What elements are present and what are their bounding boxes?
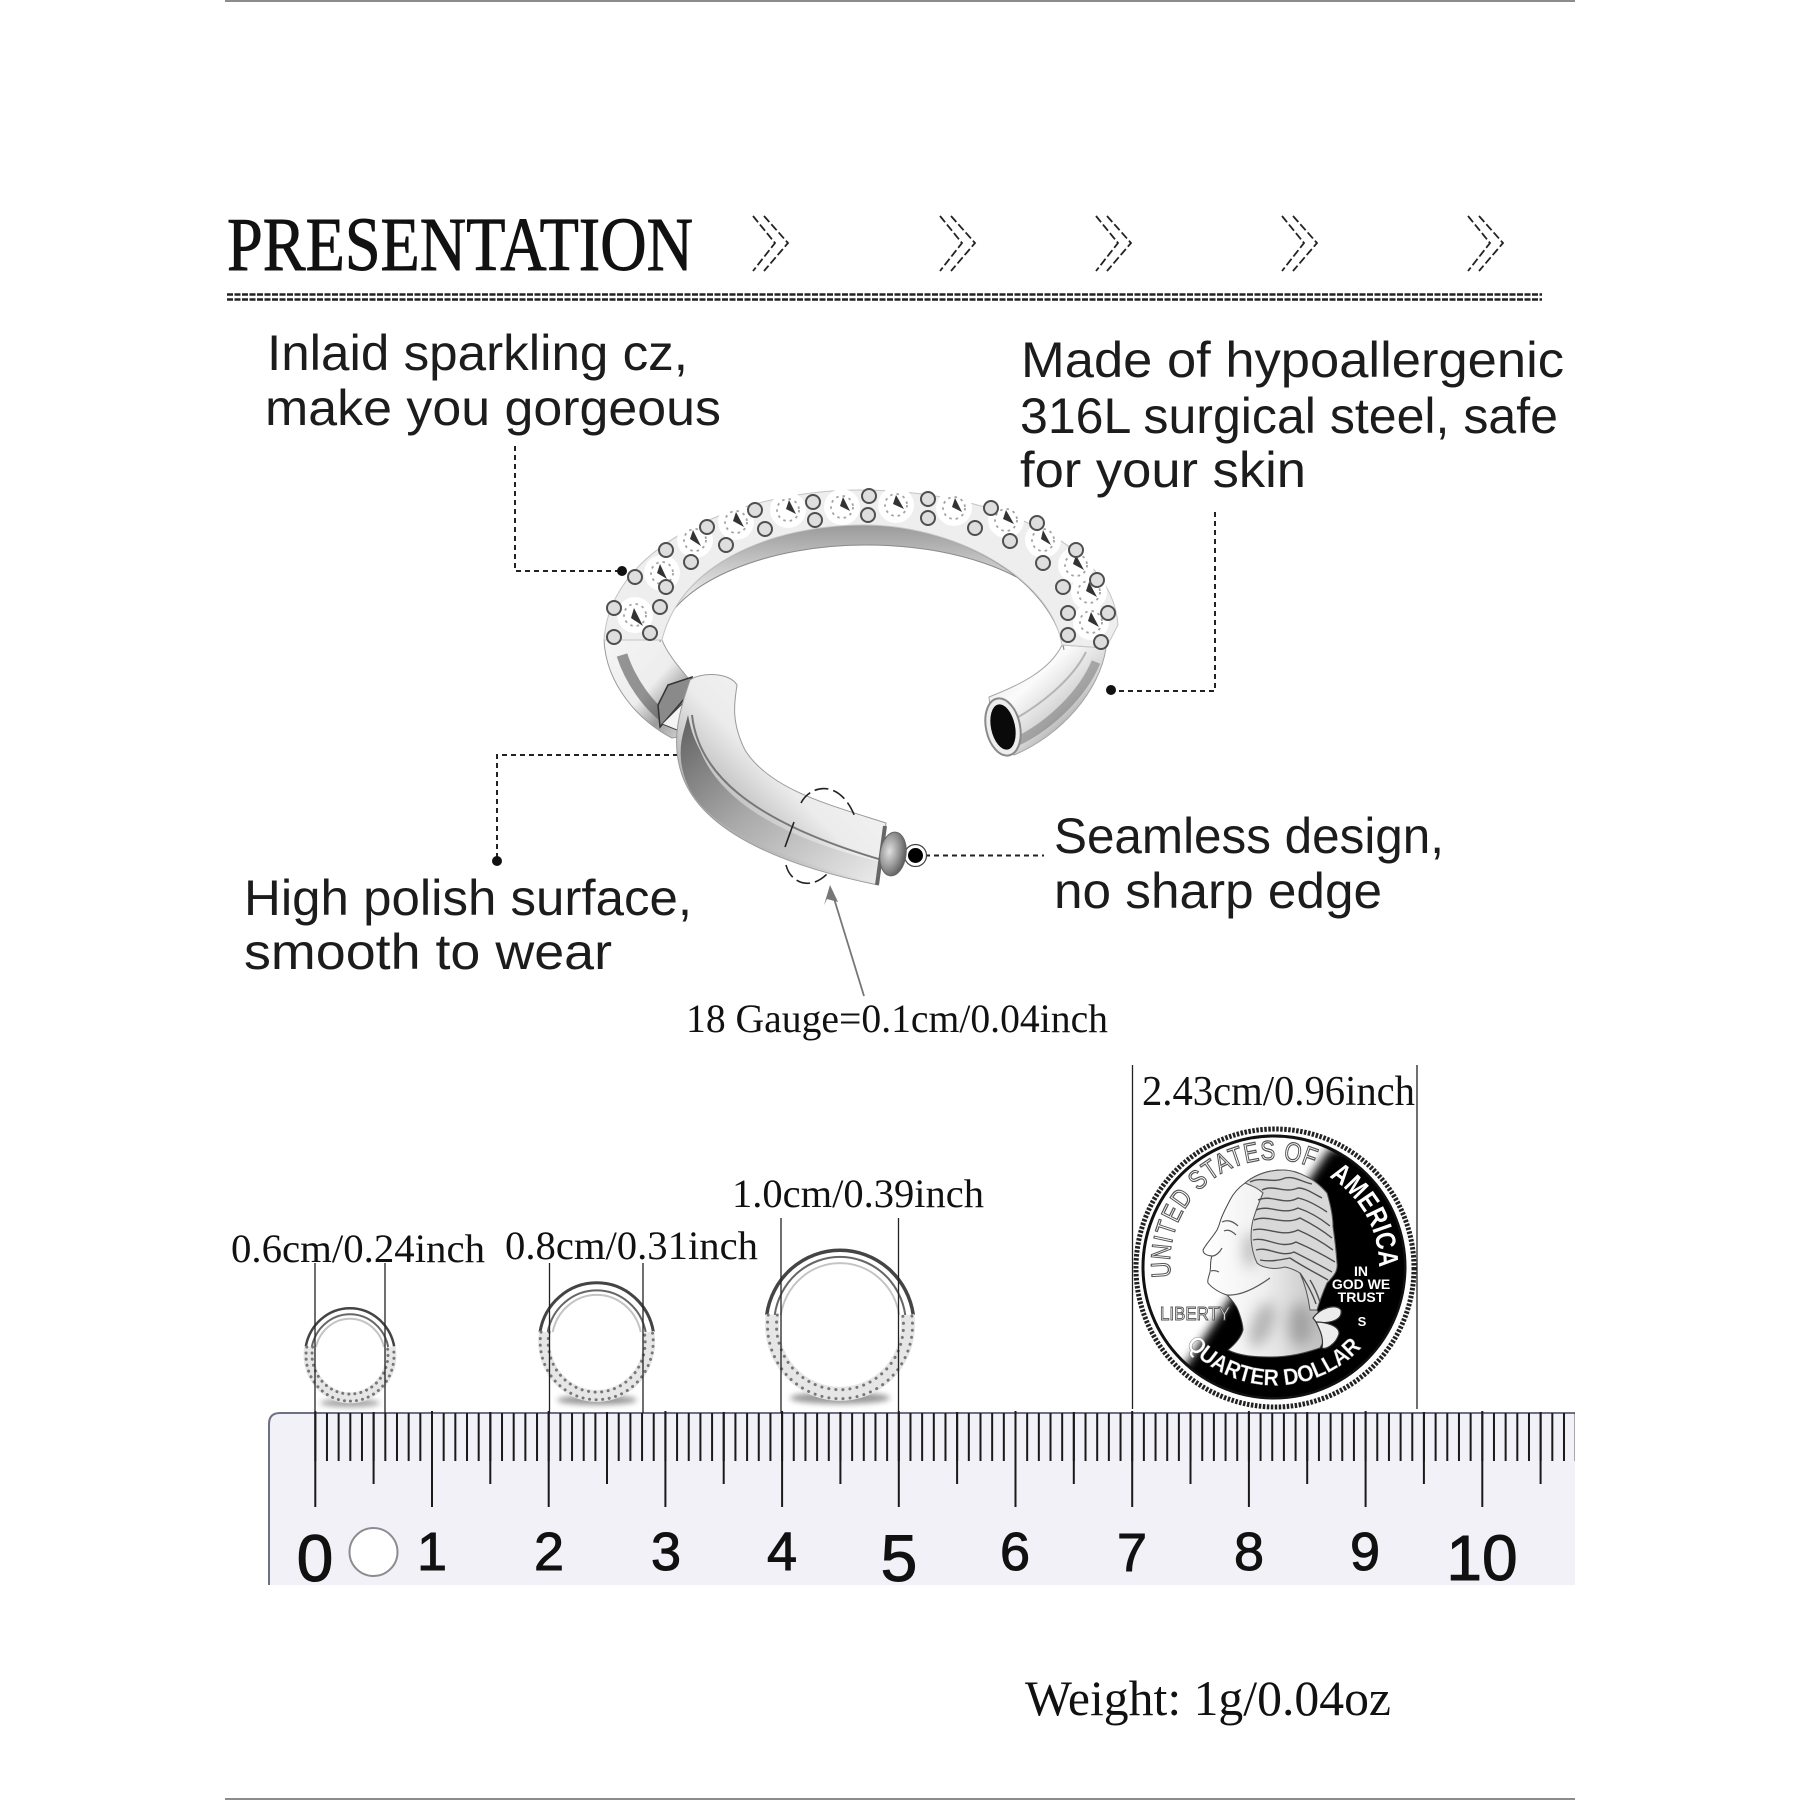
tube opening — [980, 695, 1026, 759]
ruler numerals: 5 — [881, 1521, 917, 1595]
motto lettering: IN — [1354, 1263, 1368, 1279]
ruler numerals — [297, 1521, 1518, 1595]
motto lettering: TRUST — [1338, 1289, 1385, 1305]
face shading — [1244, 1232, 1312, 1351]
coin rim — [1136, 1129, 1414, 1407]
callout: seamless design: no sharp edge — [1054, 863, 1382, 919]
ruler body — [269, 1413, 1575, 1585]
ball end — [877, 826, 909, 885]
callout: high polish surface: High polish surface, — [244, 870, 692, 926]
quarter dollar lettering: QUARTER DOLLAR — [1188, 1337, 1362, 1386]
ruler — [269, 1413, 1575, 1595]
callout: inlaid sparkling cz: make you gorgeous — [265, 380, 721, 436]
hair — [1245, 1170, 1337, 1310]
ring: 0.6cm size — [306, 1308, 394, 1407]
right tube — [989, 645, 1106, 755]
weight label: Weight: 1g/0.04oz — [1025, 1670, 1391, 1726]
size label: 1.0cm: 1.0cm/0.39inch — [732, 1171, 984, 1216]
stone prongs — [607, 489, 1115, 649]
left tube groove — [622, 655, 668, 720]
ruler numerals: 9 — [1350, 1522, 1380, 1582]
callout: high polish surface: smooth to wear — [244, 924, 612, 980]
motto lettering — [1332, 1263, 1390, 1329]
callout: seamless design: Seamless design, — [1054, 808, 1444, 864]
ruler numerals: 8 — [1234, 1522, 1264, 1582]
ruler numerals: 1 — [417, 1522, 447, 1582]
callout: high polish surface — [244, 870, 692, 980]
stones — [617, 487, 1109, 640]
hair strands — [1250, 1178, 1335, 1304]
bottom rule — [225, 1798, 1575, 1800]
ruler numerals: 7 — [1117, 1523, 1147, 1583]
stone facet dashes — [624, 494, 1102, 633]
millimetre ticks — [314, 1413, 1575, 1461]
measuring guide lines — [315, 1065, 1417, 1418]
right tube shaded band — [1018, 662, 1096, 741]
stone band — [604, 490, 1118, 648]
arrow: gauge pointer — [824, 885, 864, 996]
hinged bar — [677, 675, 886, 885]
gauge label: 18 Gauge=0.1cm/0.04inch — [686, 996, 1108, 1041]
heading divider: double dashed line — [227, 294, 1542, 300]
heading: presentation: PRESENTATION — [227, 203, 693, 287]
ruler numerals: 2 — [534, 1522, 564, 1582]
callout: inlaid sparkling cz — [265, 325, 721, 436]
left field lettering: UNITED STATES OF — [1150, 1140, 1320, 1278]
product illustration: clicker ring — [604, 487, 1118, 885]
ruler numerals: 4 — [767, 1522, 797, 1582]
hinge wedge — [658, 677, 692, 732]
half centimetre ticks — [373, 1412, 1575, 1484]
size label: quarter coin: 2.43cm/0.96inch — [1142, 1069, 1415, 1115]
callout: inlaid sparkling cz: Inlaid sparkling cz, — [267, 325, 688, 381]
america lettering: AMERICA — [1330, 1164, 1398, 1267]
ruler numerals: 3 — [651, 1522, 681, 1582]
size label: 0.8cm: 0.8cm/0.31inch — [505, 1223, 758, 1268]
quarter coin for scale — [1134, 1126, 1416, 1410]
ruler numerals: 0 — [297, 1521, 333, 1595]
ruler hole — [350, 1528, 398, 1576]
washington bust — [1203, 1170, 1337, 1357]
liberty lettering: LIBERTY — [1160, 1304, 1230, 1324]
bar shaded side — [681, 715, 881, 884]
top rule — [225, 0, 1575, 2]
callout: hypoallergenic steel — [1020, 332, 1564, 498]
callout: hypoallergenic steel: 316L surgical steel, safe — [1020, 388, 1558, 444]
icon: dashed chevrons — [753, 216, 1503, 271]
ruler top edge — [269, 1413, 1575, 1585]
stone facets — [631, 495, 1099, 627]
callout: hypoallergenic steel: Made of hypoallergenic — [1021, 332, 1564, 388]
motto lettering: S — [1358, 1314, 1367, 1329]
inner metal band — [660, 525, 1064, 650]
motto lettering: GOD WE — [1332, 1276, 1390, 1292]
ring: 1.0cm size — [767, 1250, 913, 1404]
left tube — [604, 640, 692, 738]
right tube groove — [1006, 652, 1086, 724]
hair bow — [1313, 1307, 1341, 1348]
ruler numerals: 6 — [1000, 1522, 1030, 1582]
callout: seamless design — [1054, 808, 1444, 919]
centimetre ticks — [314, 1411, 1575, 1507]
ruler numerals: 10 — [1446, 1522, 1518, 1594]
ring: 0.8cm size — [540, 1283, 653, 1405]
size label: 0.6cm: 0.6cm/0.24inch — [231, 1226, 485, 1271]
callout: hypoallergenic steel: for your skin — [1020, 442, 1306, 498]
leader lines with dots — [492, 446, 1215, 866]
coin dark field — [1181, 1146, 1404, 1397]
facial features — [1211, 1221, 1270, 1295]
gauge marker: dashed cross-section — [785, 789, 855, 883]
bar groove — [692, 715, 882, 860]
